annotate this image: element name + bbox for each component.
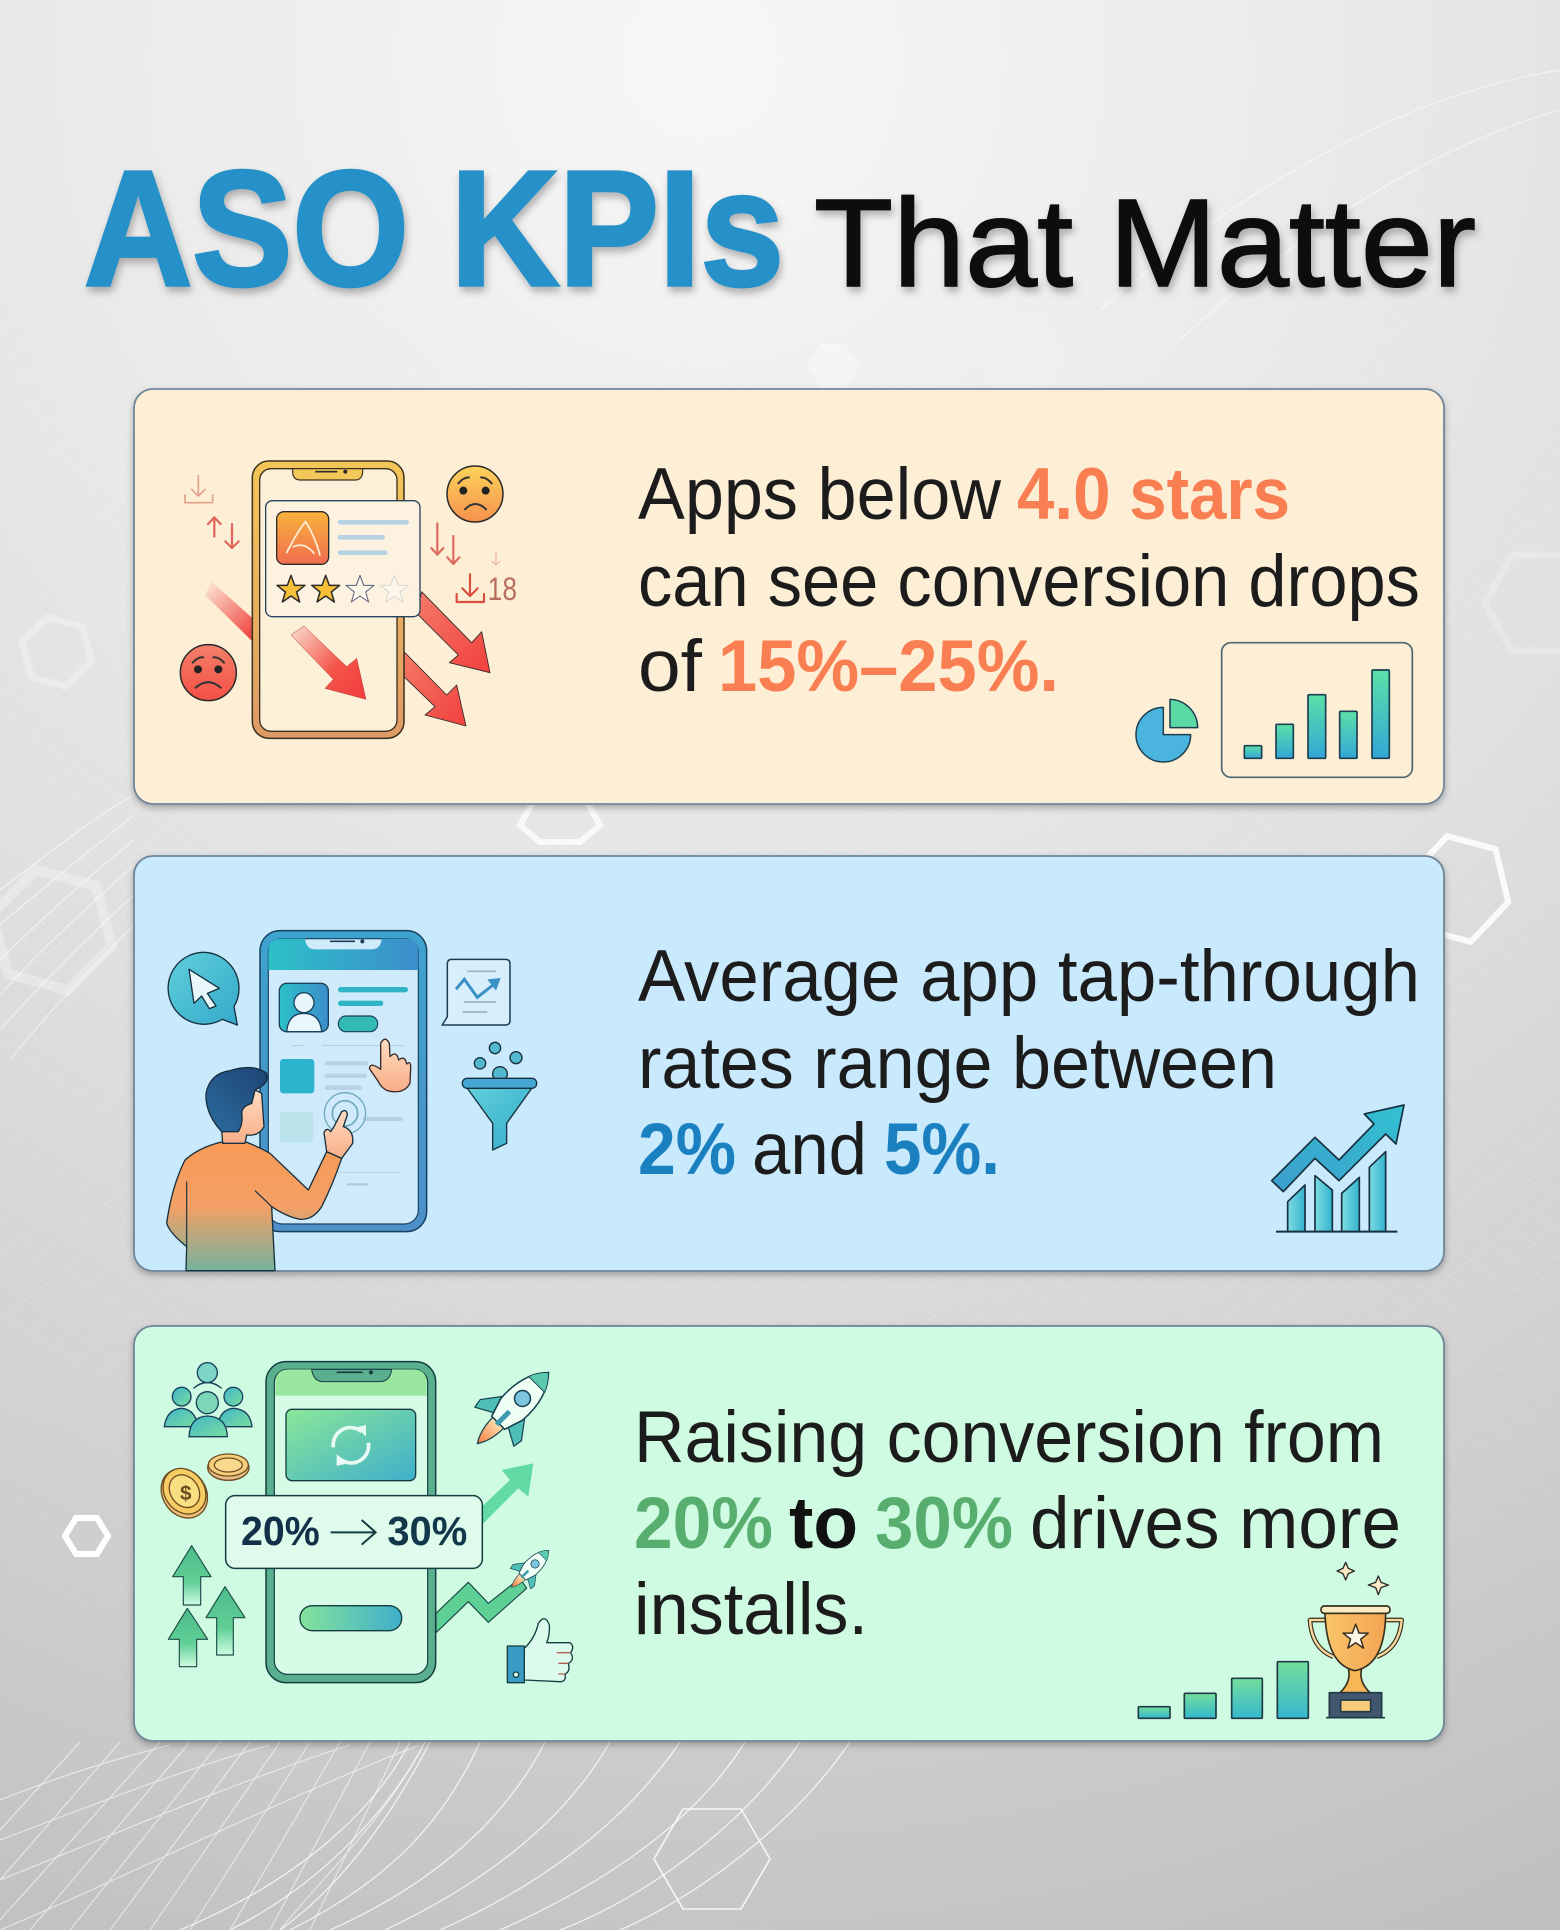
people	[164, 1363, 252, 1437]
text: app ratings: Apps below	[638, 454, 1001, 535]
illustration: person tapping phone	[167, 931, 537, 1271]
panel: tap-through rates	[134, 856, 1444, 1271]
icon: rising arrow chart	[1272, 1105, 1404, 1232]
emoji: sad red	[180, 645, 236, 701]
text: tap-through rates: rates range between	[638, 1023, 1277, 1104]
thumbs up	[507, 1619, 573, 1683]
text: conversion uplift: to	[789, 1483, 858, 1564]
pointing hand	[369, 1039, 411, 1092]
panel: conversion uplift	[134, 1326, 1444, 1741]
illustration: conversion growth	[152, 1352, 573, 1683]
text: app ratings: of	[638, 626, 703, 707]
cursor bubble	[168, 952, 239, 1025]
icon: bars and trophy	[1138, 1562, 1402, 1718]
chart bubble	[442, 959, 510, 1025]
funnel	[462, 1042, 537, 1150]
emoji: worried	[447, 466, 503, 522]
button	[300, 1606, 402, 1631]
text: conversion uplift: 20%	[634, 1483, 773, 1564]
conversion badge: 20%	[241, 1508, 320, 1554]
panel: app ratings	[134, 389, 1444, 804]
text: app ratings: 15%–25%.	[718, 626, 1059, 707]
label: download count: 18	[488, 570, 517, 607]
small rocket	[501, 1540, 559, 1598]
conversion badge	[226, 1496, 482, 1568]
sync screen	[286, 1409, 416, 1481]
small arrows and download icons	[185, 476, 500, 602]
conversion badge: 30%	[387, 1508, 467, 1554]
text: app ratings: can see conversion drops	[638, 541, 1420, 622]
text: conversion uplift: 30%	[875, 1483, 1013, 1564]
arrow on screen	[291, 626, 366, 699]
person	[167, 1068, 353, 1271]
illustration: conversion growth: $	[180, 1482, 192, 1505]
text: tap-through rates: and	[752, 1109, 867, 1190]
up arrows	[168, 1546, 245, 1667]
icon: pie and bar chart	[1136, 643, 1412, 777]
green arrow	[480, 1463, 533, 1527]
text: app ratings: 4.0 stars	[1017, 454, 1290, 535]
text: conversion uplift	[634, 1397, 1401, 1650]
left arrow behind phone	[205, 582, 253, 642]
text: tap-through rates: 2%	[638, 1109, 736, 1190]
large rocket	[457, 1352, 569, 1464]
text: tap-through rates: Average app tap-through	[638, 936, 1420, 1017]
app content	[279, 983, 328, 1032]
text: conversion uplift: Raising conversion from	[634, 1397, 1384, 1478]
title: ASO KPIs: ASO KPIs	[84, 137, 784, 320]
phone	[252, 461, 404, 738]
text: tap-through rates	[638, 936, 1420, 1190]
zigzag arrow	[436, 1578, 527, 1633]
text: conversion uplift: installs.	[634, 1569, 868, 1650]
right arrows	[404, 592, 490, 726]
app rating card	[266, 501, 420, 617]
coins	[152, 1454, 249, 1527]
phone	[266, 1362, 436, 1683]
title: That Matter: That Matter	[814, 174, 1476, 313]
illustration: phone with falling ratings	[180, 461, 517, 738]
title	[84, 137, 1476, 320]
phone	[260, 931, 427, 1232]
text: conversion uplift: drives more	[1030, 1483, 1401, 1564]
text: tap-through rates: 5%.	[884, 1109, 1000, 1190]
text: app ratings	[638, 454, 1420, 707]
